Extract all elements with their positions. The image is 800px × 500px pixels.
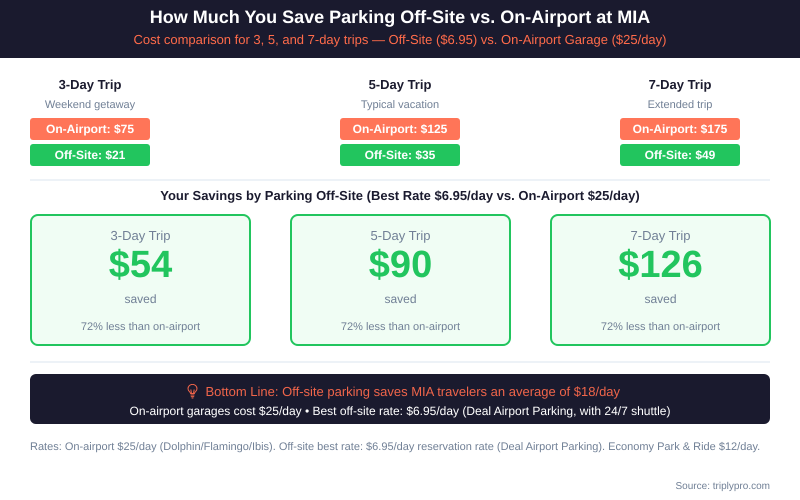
rates note: Rates: On-airport $25/day (Dolphin/Flamingo/Ibis). Off-site best rate: $6.95/day reservation rate (Deal Airport Parking). Economy Park & Ride $12/day. [30, 441, 760, 453]
trip column: 5-day: Typical vacation [361, 99, 439, 111]
savings card: 5-day: 5-Day Trip [371, 228, 430, 243]
trip column: 7-day: Extended trip [648, 99, 712, 111]
savings card: 3-day: 3-Day Trip [111, 228, 170, 243]
trip column: 5-day: 5-Day Trip [369, 77, 431, 92]
off-site cost: Off-Site: $35 [365, 148, 435, 162]
on-airport cost: On-Airport: $125 [353, 122, 447, 136]
savings card: 7-day: saved [644, 292, 677, 306]
savings card: 5-day: 72% less than on-airport [341, 321, 460, 333]
trip column: 3-day [30, 77, 150, 166]
trip column: 3-day: Weekend getaway [45, 99, 135, 111]
savings card: 3-day: $54 [109, 244, 172, 286]
header banner [0, 0, 800, 58]
trip column: 5-day [340, 77, 460, 166]
savings card: 7-day: $126 [618, 244, 703, 286]
on-airport cost [30, 118, 150, 140]
savings card: 3-day: saved [124, 292, 157, 306]
trip column: 3-day: 3-Day Trip [59, 77, 121, 92]
on-airport cost: On-Airport: $75 [46, 122, 134, 136]
off-site cost [340, 144, 460, 166]
off-site cost [30, 144, 150, 166]
off-site cost: Off-Site: $49 [645, 148, 715, 162]
on-airport cost [620, 118, 740, 140]
savings card: 3-day: 72% less than on-airport [81, 321, 200, 333]
savings card: 7-day: 7-Day Trip [631, 228, 690, 243]
off-site cost: Off-Site: $21 [55, 148, 125, 162]
savings card: 3-day [30, 214, 251, 346]
icon: light bulb [188, 384, 198, 398]
savings card: 5-day: $90 [369, 244, 432, 286]
trip column: 7-day: 7-Day Trip [649, 77, 711, 92]
bottom line callout [30, 374, 770, 424]
title: How Much You Save Parking Off-Site vs. On-Airport at MIA [150, 7, 650, 27]
savings card: 5-day [290, 214, 511, 346]
on-airport cost: On-Airport: $175 [633, 122, 727, 136]
savings card: 7-day: 72% less than on-airport [601, 321, 720, 333]
source: Source: triplypro.com [676, 481, 770, 492]
savings heading: Your Savings by Parking Off-Site (Best Rate $6.95/day vs. On-Airport $25/day) [160, 188, 640, 203]
subtitle: Cost comparison for 3, 5, and 7-day trips — Off-Site ($6.95) vs. On-Airport Garage ($25/day) [134, 32, 666, 47]
callout detail: On-airport garages cost $25/day • Best off-site rate: $6.95/day (Deal Airport Parking, with 24/7 shuttle) [130, 404, 670, 418]
trip column: 7-day [620, 77, 740, 166]
callout headline: Bottom Line: Off-site parking saves MIA travelers an average of $18/day [206, 384, 620, 399]
savings card: 7-day [550, 214, 771, 346]
off-site cost [620, 144, 740, 166]
savings card: 5-day: saved [384, 292, 417, 306]
on-airport cost [340, 118, 460, 140]
